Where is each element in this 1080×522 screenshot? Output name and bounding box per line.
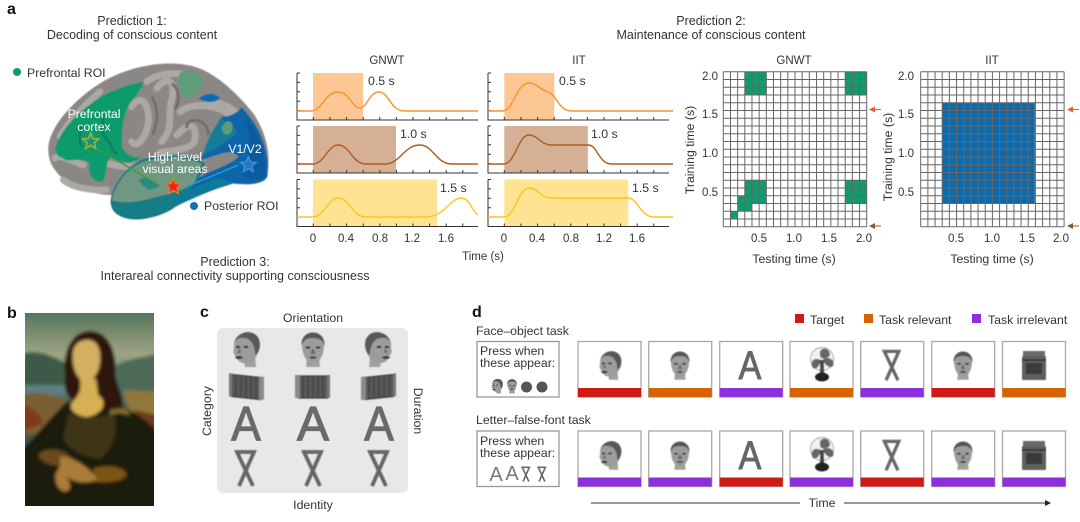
- connection lines and stars: [83, 133, 256, 193]
- panel label b: b: [7, 305, 17, 322]
- matrix IIT: Testing time (s): [950, 252, 1034, 266]
- letters row: [231, 396, 394, 451]
- matrix IIT: 2.0: [1053, 233, 1069, 245]
- matrix IIT: IIT: [985, 55, 999, 67]
- time axis labels: 0: [310, 233, 316, 245]
- time axis labels: 1.6: [438, 233, 454, 245]
- legend: stimulus types: Task irrelevant: [988, 313, 1068, 327]
- time axis labels: [310, 233, 645, 263]
- panel label d: d: [472, 304, 482, 321]
- heading: prediction 2: Maintenance of conscious content: [616, 28, 806, 42]
- decoding charts: [297, 55, 673, 263]
- trial 1: [578, 342, 641, 397]
- chart IIT 0.5 s: [488, 73, 673, 120]
- time axis labels: 1.2: [596, 233, 612, 245]
- chart IIT 1.0 s: 1.0 s: [591, 127, 618, 141]
- chart titles: IIT: [572, 55, 586, 67]
- task row: letter-false-font: Letter–false-font task: [476, 413, 592, 427]
- gray background: [217, 328, 408, 493]
- task row: face-object: Face–object task: [476, 324, 570, 338]
- brain labels: visual areas: [142, 162, 208, 176]
- time axis labels: 0.4: [338, 233, 355, 245]
- heading: prediction 2: [616, 14, 806, 42]
- brain labels: Prefrontal: [68, 107, 120, 121]
- trial 6: [932, 342, 995, 397]
- time axis labels: 1.6: [629, 233, 645, 245]
- chart GNWT 1.5 s: [297, 180, 478, 226]
- trial 4: [790, 342, 853, 397]
- instruction box: Press when: [480, 344, 544, 358]
- heading: prediction 3: Prediction 3:: [200, 255, 270, 269]
- heading: prediction 2: Prediction 2:: [676, 14, 746, 28]
- trial 2: [649, 431, 712, 486]
- chart GNWT 0.5 s: 0.5 s: [368, 74, 395, 88]
- matrix GNWT: 1.5: [702, 109, 718, 121]
- time axis labels: 0.8: [372, 233, 388, 245]
- instruction box: these appear:: [480, 356, 555, 370]
- heading: prediction 1: Prediction 1:: [97, 14, 167, 28]
- panel c: stimulus matrix: [200, 311, 425, 512]
- trial 2: [649, 342, 712, 397]
- brain labels: High-level: [148, 150, 202, 164]
- legend: posterior ROI: Posterior ROI: [204, 199, 278, 213]
- instruction box: Press when: [480, 434, 544, 448]
- trial 3: A: [739, 342, 762, 388]
- letters row: A: [231, 396, 261, 450]
- heading: prediction 1: Decoding of conscious content: [47, 28, 218, 42]
- matrix GNWT: 1.5: [821, 233, 837, 245]
- time axis labels: 1.2: [404, 233, 420, 245]
- brain illustration: [48, 64, 269, 219]
- accordions row: [229, 373, 396, 400]
- trial 7: [1002, 431, 1066, 486]
- axis labels: Category: [200, 385, 214, 436]
- matrix IIT: 2.0: [898, 71, 914, 83]
- matrix IIT: Training time (s): [881, 113, 895, 201]
- matrix GNWT: 1.0: [786, 233, 802, 245]
- letters row: A: [297, 398, 329, 451]
- chart IIT 1.5 s: [488, 180, 673, 226]
- time arrow: Time: [809, 496, 836, 510]
- chart IIT 1.0 s: [488, 126, 673, 173]
- trial 3: [720, 431, 783, 486]
- matrix IIT: 0.5: [898, 187, 914, 199]
- heading: prediction 3: Interareal connectivity supporting consciousness: [101, 269, 369, 283]
- matrix GNWT: 1.0: [702, 148, 718, 160]
- axis labels: Orientation: [283, 311, 343, 325]
- trial 4: [790, 431, 853, 486]
- matrix GNWT: Training time (s): [683, 106, 697, 194]
- chart GNWT 1.5 s: 1.5 s: [440, 181, 467, 195]
- brain labels: cortex: [77, 120, 111, 134]
- panel label c: c: [200, 304, 209, 321]
- chart IIT 1.5 s: 1.5 s: [632, 181, 659, 195]
- chart titles: GNWT: [369, 55, 405, 67]
- trial 6: [932, 431, 995, 486]
- legend: prefrontal ROI: Prefrontal ROI: [27, 66, 106, 80]
- brain labels: V1/V2: [228, 142, 262, 156]
- matrix IIT: 1.0: [898, 148, 914, 160]
- chart GNWT 0.5 s: [297, 73, 478, 120]
- heading: prediction 3: [101, 255, 369, 283]
- matrix GNWT: [683, 55, 872, 266]
- chart IIT 0.5 s: 0.5 s: [559, 74, 586, 88]
- instruction box: [477, 342, 559, 397]
- brain labels: [68, 107, 262, 176]
- chart GNWT 1.0 s: [297, 126, 478, 173]
- painting: Mona Lisa: [17, 305, 163, 512]
- legend: stimulus types: Target: [810, 313, 845, 327]
- matrix GNWT: GNWT: [776, 55, 812, 67]
- letters row: A: [364, 396, 394, 450]
- chart GNWT 1.0 s: 1.0 s: [400, 127, 427, 141]
- false-font row: [237, 452, 387, 486]
- instruction box: these appear:: [480, 446, 555, 460]
- matrix IIT: 1.0: [984, 233, 1000, 245]
- axis labels: Duration: [411, 388, 425, 434]
- axis labels: [200, 311, 425, 512]
- time arrow: [591, 496, 1051, 510]
- time axis labels: Time (s): [462, 251, 504, 263]
- matrix IIT: [881, 55, 1069, 266]
- matrix GNWT: Testing time (s): [752, 252, 836, 266]
- legend: stimulus types: [795, 313, 1068, 327]
- legend: stimulus types: Task relevant: [879, 313, 952, 327]
- instruction box: A: [489, 464, 503, 486]
- task row: letter-false-font: [476, 413, 1066, 486]
- matrix IIT: 0.5: [948, 233, 964, 245]
- trial 5: [861, 431, 924, 486]
- chart titles: [369, 55, 586, 67]
- faces row: [233, 332, 392, 367]
- instruction box: A: [505, 463, 519, 485]
- instruction box: [477, 431, 559, 486]
- trial 7: [1002, 342, 1066, 397]
- panel label a: a: [7, 1, 16, 18]
- matrix GNWT: 2.0: [702, 71, 718, 83]
- trial 3: [720, 342, 783, 397]
- time axis labels: 0.8: [563, 233, 579, 245]
- arrows: stimulus offset markers: [869, 106, 1079, 229]
- matrix GNWT: 0.5: [702, 187, 718, 199]
- task row: face-object: [476, 324, 1066, 397]
- trial 1: [578, 431, 641, 486]
- time axis labels: 0: [501, 233, 507, 245]
- matrix IIT: 1.5: [1019, 233, 1035, 245]
- trial 3: A: [739, 432, 762, 478]
- trial 5: [861, 342, 924, 397]
- matrix IIT: 1.5: [898, 109, 914, 121]
- matrix GNWT: 0.5: [751, 233, 767, 245]
- axis labels: Identity: [293, 498, 334, 512]
- matrix GNWT: 2.0: [856, 233, 872, 245]
- heading: prediction 1: [47, 14, 218, 42]
- time axis labels: 0.4: [529, 233, 546, 245]
